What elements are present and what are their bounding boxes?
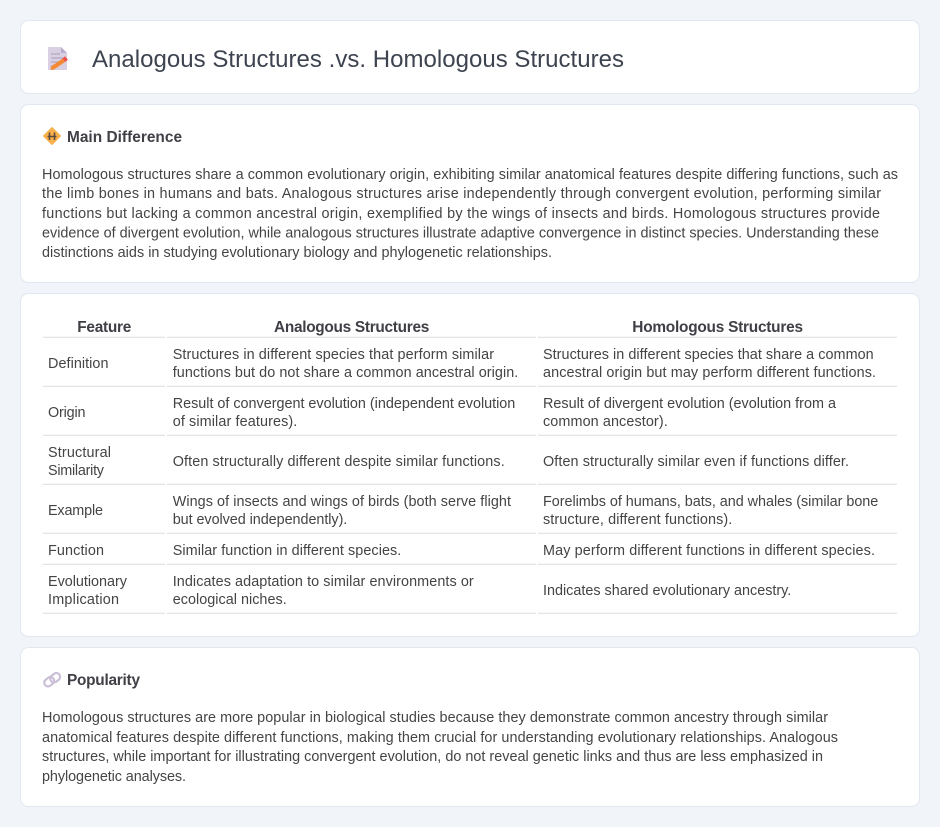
table row: origin: of similar features). [173, 414, 297, 430]
heading: main difference: Main Difference [67, 129, 182, 146]
table row: evolutionary implication: ecological niches. [173, 592, 287, 608]
table row: evolutionary implication [48, 574, 791, 608]
table row: function: May perform different functions in different species. [543, 543, 875, 559]
table header row: Feature [77, 319, 132, 336]
table row: example [48, 494, 878, 528]
table row: evolutionary implication: Indicates adaptation to similar environments or [173, 574, 474, 590]
table row: function: Function [48, 543, 104, 559]
table row: definition: functions but do not share a common ancestral origin. [173, 365, 518, 381]
table row: origin [48, 396, 836, 430]
text block: main difference: evidence of divergent evolution, while analogous structures illustrate adaptive convergence in distinct species. Understanding these [42, 226, 879, 242]
table row: definition [48, 347, 876, 381]
table row: definition: Structures in different species that perform similar [173, 347, 494, 363]
panel: title header [20, 20, 920, 94]
text block: popularity: phylogenetic analyses. [42, 769, 186, 785]
text block: main difference: Homologous structures share a common evolutionary origin, exhibiting similar anatomical features despite differing functions, such as [42, 167, 898, 183]
table header row [77, 319, 803, 336]
text block: popularity: Homologous structures are more popular in biological studies because they demonstrate common ancestry through similar [42, 710, 828, 726]
table row: structural similarity: Often structurally different despite similar functions. [173, 454, 505, 470]
table row: definition: Structures in different species that share a common [543, 347, 874, 363]
text block: main difference [42, 167, 898, 261]
table row: example: Wings of insects and wings of birds (both serve flight [173, 494, 511, 510]
icon: orange diamond sign [44, 128, 60, 144]
table header row: Analogous Structures [274, 319, 429, 336]
table row: structural similarity [48, 445, 849, 479]
text block: main difference: the limb bones in humans and bats. Analogous structures arise independently through convergent evolution, performing similar [42, 186, 881, 202]
table row: origin: common ancestor). [543, 414, 668, 430]
table row: example: Forelimbs of humans, bats, and whales (similar bone [543, 494, 878, 510]
table header row: Homologous Structures [632, 319, 803, 336]
table row: origin: Result of convergent evolution (independent evolution [173, 396, 515, 412]
panel: main difference [20, 104, 920, 282]
panel: comparison table [20, 294, 920, 636]
text block: main difference: distinctions aids in studying evolutionary biology and phylogenetic relationships. [42, 245, 552, 261]
title: Analogous Structures .vs. Homologous Structures [92, 46, 624, 73]
icon: chain link [43, 672, 62, 688]
text block: popularity: anatomical features despite different functions, making them crucial for understanding evolutionary relationships. Analogous [42, 730, 838, 746]
table row: example: Example [48, 503, 103, 519]
table row: origin: Result of divergent evolution (evolution from a [543, 396, 836, 412]
table row: function: Similar function in different species. [173, 543, 401, 559]
table row: origin: Origin [48, 405, 86, 421]
panel: popularity [20, 648, 920, 806]
text block: main difference: functions but lacking a common ancestral origin, exemplified by the wings of insects and birds. Homologous structures provide [42, 206, 880, 222]
table row: example: structure, different functions). [543, 512, 732, 528]
table row: example: but evolved independently). [173, 512, 347, 528]
text block: popularity: structures, while important for illustrating convergent evolution, do not reveal genetic links and thus are less emphasized in [42, 749, 823, 765]
table row: structural similarity: Similarity [48, 463, 105, 479]
table row: evolutionary implication: Evolutionary [48, 574, 128, 590]
table row: structural similarity: Often structurally similar even if functions differ. [543, 454, 849, 470]
table row: evolutionary implication: Indicates shared evolutionary ancestry. [543, 583, 791, 599]
icon: document with pencil [48, 47, 68, 70]
heading: popularity: Popularity [67, 672, 140, 689]
text block: popularity [42, 710, 838, 785]
table row: structural similarity: Structural [48, 445, 111, 461]
table row: definition: ancestral origin but may perform different functions. [543, 365, 876, 381]
table row: definition: Definition [48, 356, 108, 372]
table row: function [48, 543, 875, 559]
table row: evolutionary implication: Implication [48, 592, 119, 608]
